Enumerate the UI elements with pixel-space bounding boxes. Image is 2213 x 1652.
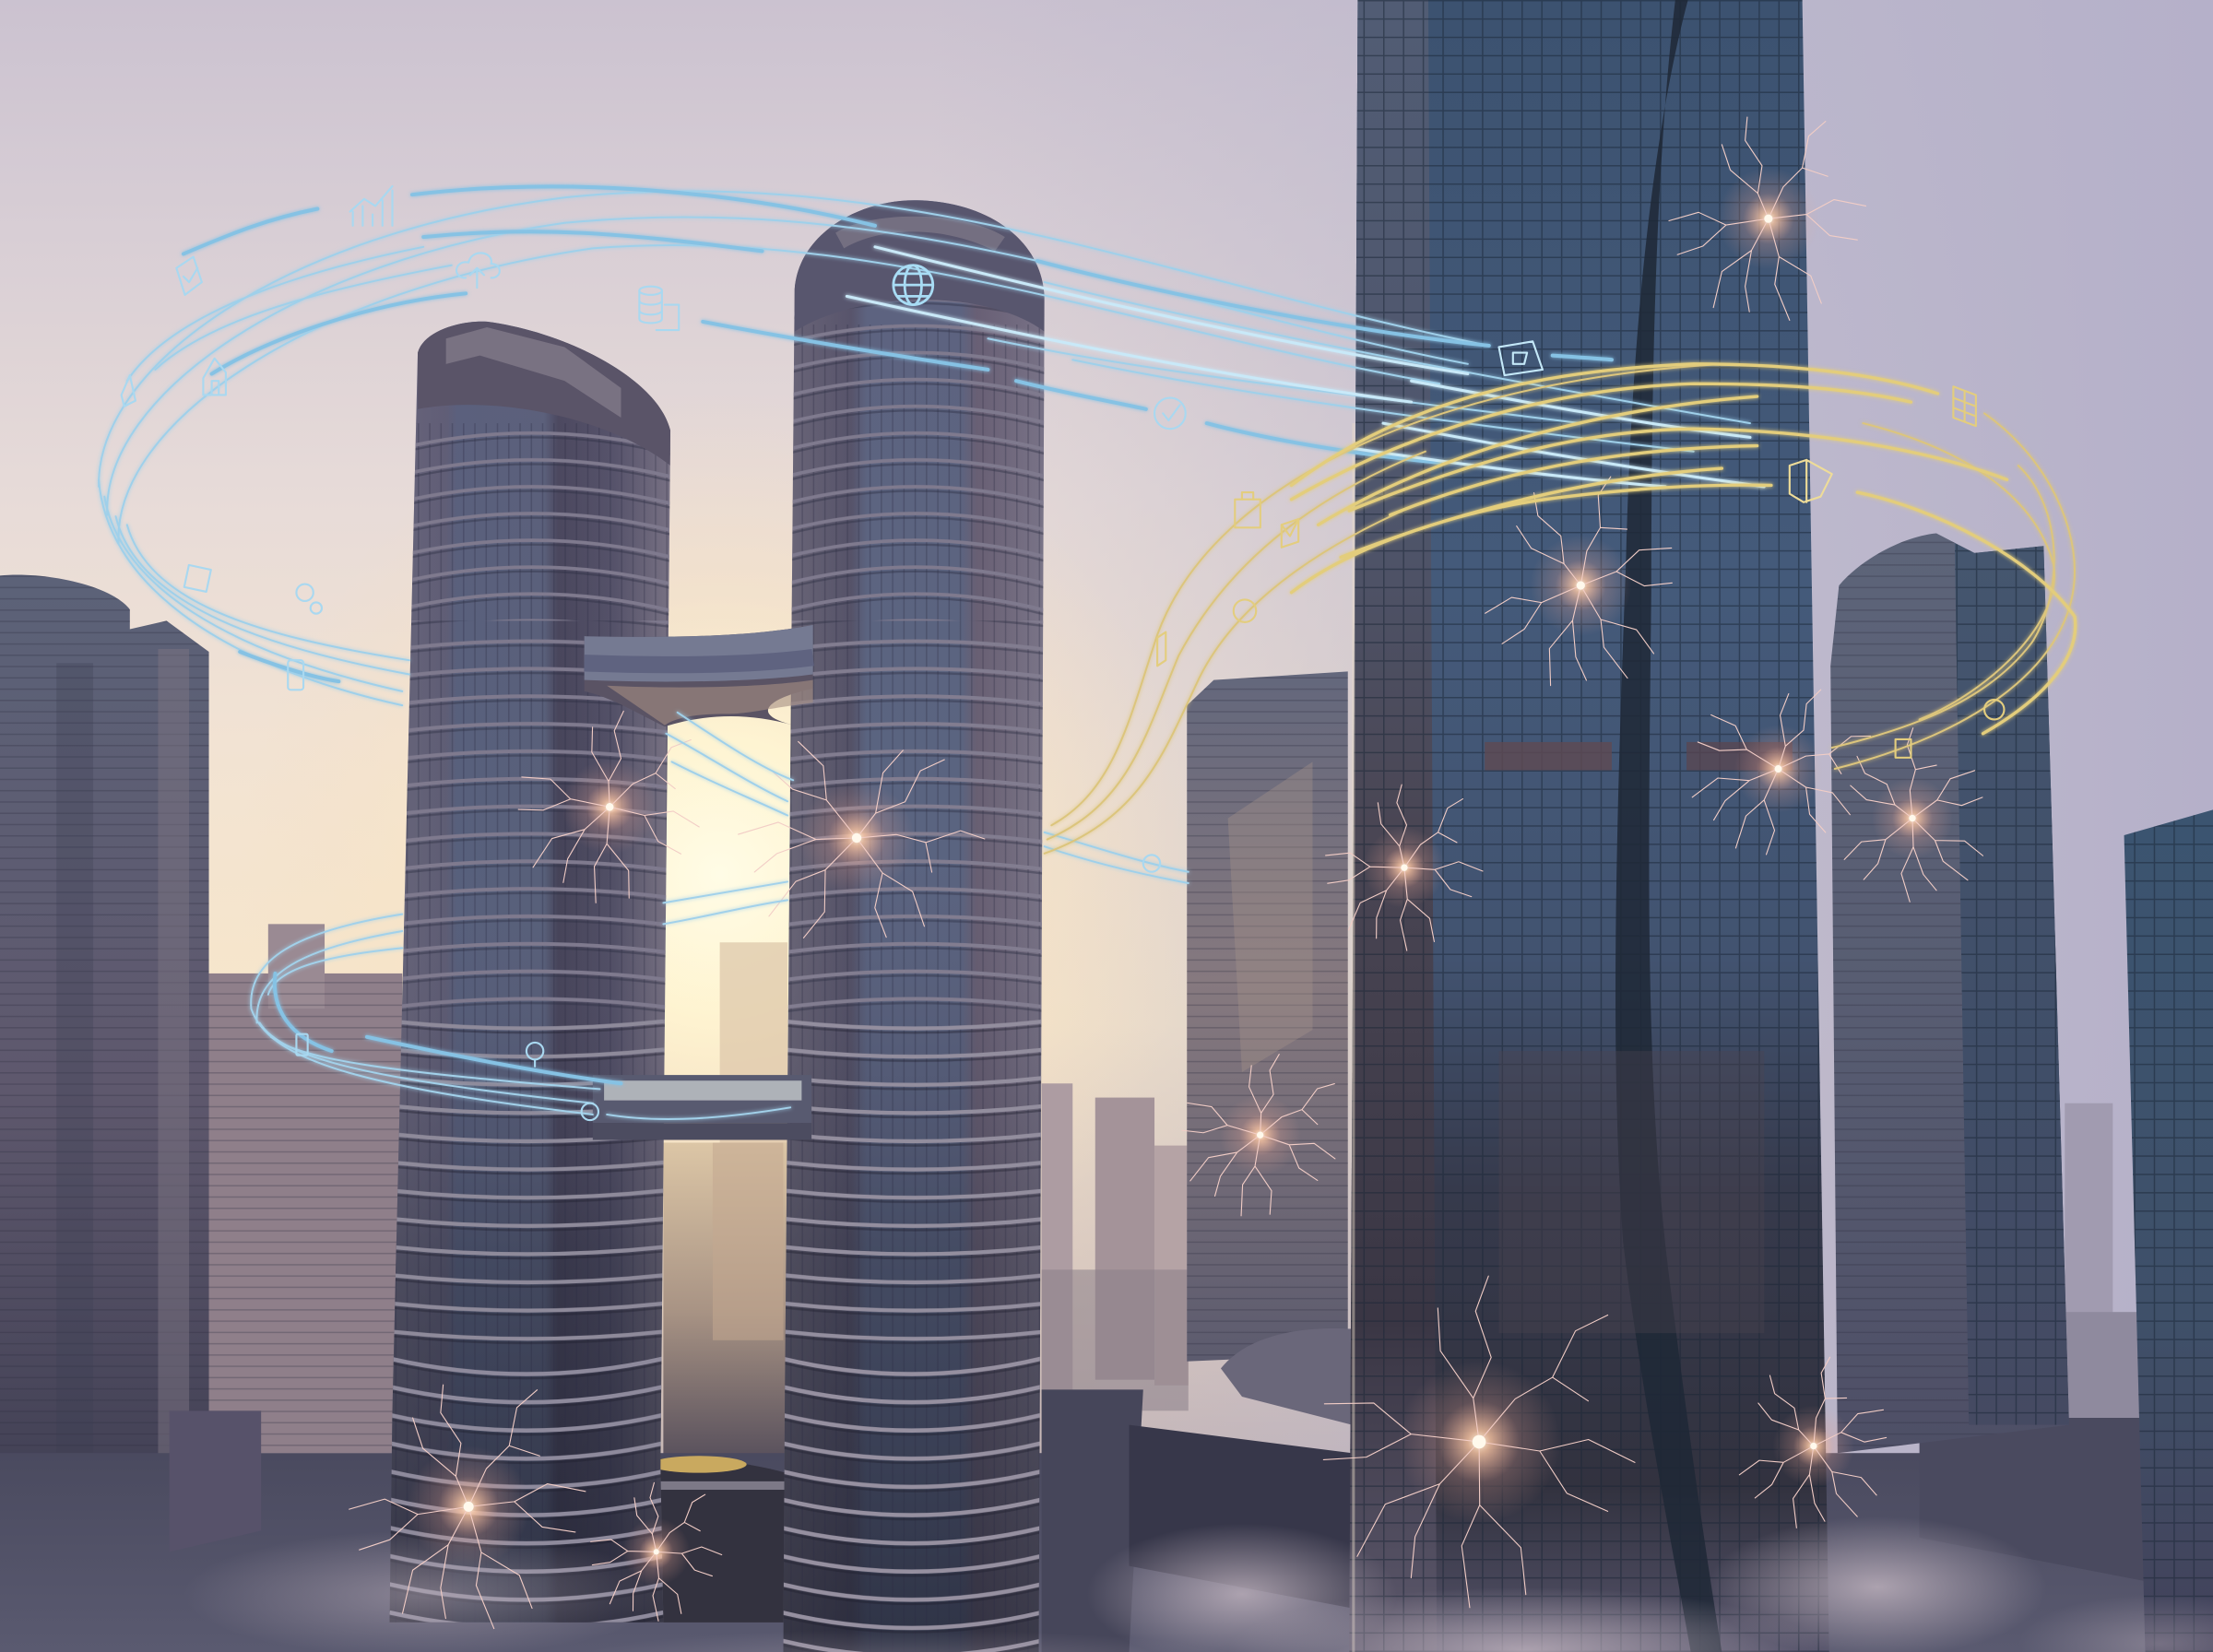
supply icons: [1157, 386, 2004, 758]
spark: mid building: [1154, 1028, 1365, 1242]
spark: glass tower middle: [1459, 462, 1701, 709]
blue lower data ring: [251, 881, 790, 1119]
icon: box: [1790, 460, 1832, 502]
yellow data ring: [1045, 364, 2076, 854]
icon: badge check: [1154, 398, 1186, 429]
icon: bar chart: [350, 186, 393, 226]
curved dark seam: [1615, 0, 1722, 1652]
icon: round badge: [1984, 700, 2004, 719]
icon: cloud lower: [527, 1043, 543, 1067]
spark: glass tower top: [1669, 117, 1865, 320]
distant hazy buildings: [197, 924, 2152, 1481]
ground and podium: [0, 1328, 2213, 1652]
tower A: [381, 317, 678, 1630]
spark: glass tower right base: [1711, 1343, 1914, 1550]
left foreground building: [0, 574, 209, 1601]
icon: small tag: [122, 375, 136, 407]
icon: gears: [296, 584, 322, 614]
icon: tablet: [184, 565, 211, 592]
cracks and sparks: [349, 117, 2020, 1639]
mid building: [1187, 671, 1348, 1362]
far right building: [2124, 809, 2213, 1652]
spark: tower A upper: [490, 686, 728, 927]
icon: envelope: [1282, 519, 1298, 548]
icon: tag lower: [296, 1034, 308, 1056]
spark: tower A base: [349, 1385, 586, 1629]
low haze over city: [183, 1516, 2213, 1652]
sky bridge upper: [585, 625, 813, 726]
tall glass tower: [1349, 0, 1829, 1652]
icon: calendar grid: [1953, 386, 1976, 426]
icon: clip: [1157, 632, 1166, 666]
data icons: [122, 186, 1543, 1120]
icon: house chart: [203, 359, 226, 395]
icon: briefcase: [1235, 492, 1260, 527]
sky bridge lower: [593, 1075, 811, 1139]
blue upper data ring: [99, 186, 1764, 883]
icon: database: [639, 287, 679, 330]
spark: podium: [579, 1474, 732, 1630]
spark: glass tower base: [1284, 1244, 1672, 1639]
icon: small doc: [1896, 739, 1911, 758]
icon: drop: [1143, 855, 1160, 872]
icon: phone: [288, 660, 303, 690]
icon: payment card: [1499, 341, 1543, 375]
right round tower: [1830, 533, 2069, 1453]
icon: document check: [176, 257, 202, 295]
spark: glass tower left edge: [1312, 773, 1495, 962]
icon: basket: [1234, 599, 1256, 622]
spark: round tower: [1803, 709, 2020, 928]
tower B: [776, 197, 1051, 1652]
spark: tower B: [701, 683, 1012, 991]
icon: globe: [893, 266, 933, 305]
spark: glass tower window: [1656, 646, 1899, 891]
icon: small globe lower: [582, 1103, 598, 1120]
icon: cloud upload: [456, 253, 500, 288]
